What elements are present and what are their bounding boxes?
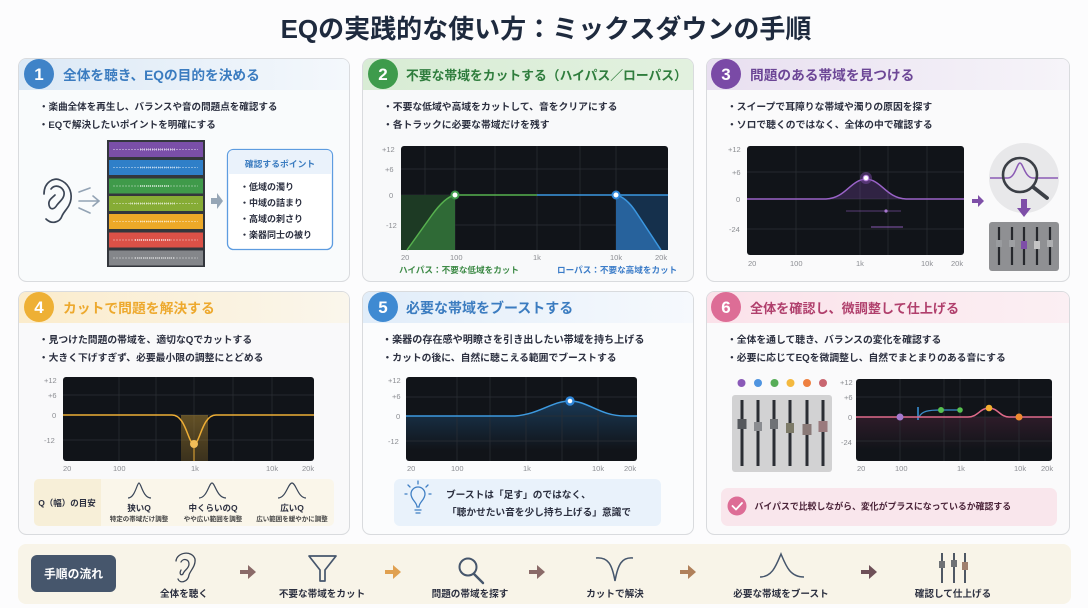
- step 2 bullets: [383, 100, 617, 131]
- step 1 bullets: [39, 101, 277, 131]
- chart: sweep peak: [747, 146, 964, 255]
- Q wide: 広いQ: [280, 503, 304, 513]
- step 3 bullets: [727, 100, 933, 131]
- axis labels: 20: [63, 464, 71, 473]
- callout: check points: [228, 150, 332, 250]
- step 5 header: [363, 292, 693, 323]
- chart: narrow cut: [63, 377, 314, 461]
- step 1 header: [19, 59, 349, 90]
- Q medium: 中くらいのQ: [188, 503, 238, 513]
- axis labels: [382, 145, 667, 262]
- step 2 number badge: [368, 59, 398, 89]
- axis labels: +12: [840, 378, 853, 387]
- flow step: cut: [586, 558, 644, 600]
- axis labels: 20: [401, 253, 409, 262]
- filter captions: ローパス：不要な高域をカット: [557, 264, 677, 275]
- step 1 number badge: 1: [34, 65, 44, 84]
- tip box: 「聴かせたい音を少し持ち上げる」意識で: [447, 506, 631, 518]
- icon: mixer faders: [732, 395, 832, 472]
- panel: step 1: [18, 58, 350, 282]
- step 3 number badge: [711, 59, 741, 89]
- tip box: [394, 479, 661, 526]
- icon: sound arrow: [79, 188, 99, 213]
- step 3 bullets: ・ソロで聴くのではなく、全体の中で確認する: [727, 118, 933, 131]
- axis labels: 1k: [957, 464, 965, 473]
- step 6 bullets: ・全体を通して聴き、バランスの変化を確認する: [727, 333, 941, 346]
- panel: step 5: [362, 292, 694, 534]
- axis labels: 0: [389, 191, 393, 200]
- filter captions: ハイパス：不要な低域をカット: [399, 264, 519, 275]
- step 1 number badge: [24, 59, 54, 89]
- step 2 number badge: 2: [378, 65, 388, 84]
- callout: check points: ・低域の濁り: [240, 181, 294, 192]
- axis labels: -12: [388, 437, 399, 446]
- track stack: [107, 140, 205, 267]
- step 2 bullets: ・各トラックに必要な帯域だけを残す: [383, 118, 550, 131]
- step 4 header: [19, 292, 349, 323]
- axis labels: [388, 376, 636, 473]
- axis labels: 100: [790, 259, 803, 268]
- Q medium: やや広い範囲を調整: [184, 514, 243, 523]
- axis labels: [728, 145, 963, 268]
- icon: ear: [44, 179, 71, 222]
- axis labels: 10k: [1014, 464, 1026, 473]
- step 5 number badge: [368, 292, 398, 322]
- filter captions: [399, 264, 677, 275]
- flow step: search: [432, 558, 508, 600]
- step 5 number badge: 5: [378, 298, 388, 317]
- tip box: ブーストは「足す」のではなく、: [446, 488, 591, 501]
- axis labels: 10k: [610, 253, 622, 262]
- step 6 number badge: 6: [721, 298, 731, 317]
- axis labels: 10k: [921, 259, 933, 268]
- axis labels: +12: [388, 376, 401, 385]
- track colour dots: [738, 379, 827, 387]
- axis labels: -24: [729, 225, 740, 234]
- flow step: listen: [160, 553, 208, 600]
- step 4 heading: カットで問題を解決する: [63, 301, 215, 316]
- axis labels: -12: [386, 221, 397, 230]
- callout: check points: ・高域の刺さり: [240, 213, 303, 224]
- axis labels: 100: [450, 253, 463, 262]
- flow step: boost: 必要な帯域をブースト: [733, 588, 829, 600]
- Q guide box: Q（幅）の目安: [38, 498, 96, 508]
- axis labels: 20: [407, 464, 415, 473]
- icon: faders: [989, 222, 1059, 271]
- icon: check mark: [728, 496, 746, 516]
- axis labels: +12: [44, 376, 57, 385]
- arrow: [240, 565, 256, 579]
- axis labels: 20: [857, 464, 865, 473]
- step 1 heading: 全体を聴き、EQの目的を決める: [63, 67, 260, 83]
- axis labels: +6: [732, 168, 741, 177]
- callout: bypass check: [721, 488, 1057, 526]
- axis labels: 0: [848, 413, 852, 422]
- axis labels: 0: [736, 195, 740, 204]
- axis labels: +12: [382, 145, 395, 154]
- axis labels: 1k: [523, 464, 531, 473]
- flow step: finish: [915, 553, 991, 600]
- flow step: cut: カットで解決: [586, 588, 644, 600]
- axis labels: -24: [841, 438, 852, 447]
- step 3 number badge: 3: [721, 65, 731, 84]
- step 3 heading: 問題のある帯域を見つける: [750, 67, 914, 83]
- axis labels: -12: [44, 436, 55, 445]
- step 2 bullets: ・不要な低域や高域をカットして、音をクリアにする: [383, 100, 617, 113]
- callout: check points: ・中域の詰まり: [240, 197, 303, 208]
- axis labels: 0: [52, 411, 56, 420]
- step 1 bullets: ・EQで解決したいポイントを明確にする: [39, 119, 216, 131]
- panel: procedure flow: [18, 544, 1071, 604]
- step 4 bullets: ・大きく下げすぎず、必要最小限の調整にとどめる: [39, 351, 263, 364]
- axis labels: 20k: [302, 464, 314, 473]
- Q narrow: 狭いQ: [127, 503, 151, 513]
- axis labels: 20k: [1041, 464, 1053, 473]
- arrow: [972, 195, 984, 207]
- Q narrow: [110, 483, 169, 523]
- arrow: [211, 193, 223, 209]
- axis labels: 20k: [624, 464, 636, 473]
- step 4 number badge: 4: [34, 298, 44, 317]
- step 6 number badge: [711, 292, 741, 322]
- step 4 number badge: [24, 292, 54, 322]
- step 6 bullets: ・必要に応じてEQを微調整し、自然でまとまりのある音にする: [727, 351, 1006, 364]
- axis labels: 10k: [592, 464, 604, 473]
- chart: final EQ curve: [856, 379, 1052, 461]
- step 2 header: [363, 59, 693, 90]
- axis labels: 20k: [951, 259, 963, 268]
- step 6 header: [707, 292, 1069, 323]
- step 3 header: [707, 59, 1069, 90]
- step 6 bullets: [727, 333, 1006, 364]
- step 2 heading: 不要な帯域をカットする（ハイパス／ローパス）: [406, 68, 687, 83]
- callout: check points: ・楽器同士の被り: [240, 229, 312, 240]
- axis labels: +6: [844, 393, 853, 402]
- step 5 bullets: ・カットの後に、自然に聴こえる範囲でブーストする: [382, 351, 617, 364]
- axis labels: +12: [728, 145, 741, 154]
- flow step: search: 問題の帯域を探す: [432, 588, 508, 600]
- step 4 bullets: ・見つけた問題の帯域を、適切なQでカットする: [39, 333, 252, 346]
- icon: light bulb: [405, 481, 431, 513]
- step 5 bullets: [382, 333, 644, 364]
- Q guide box: [34, 479, 334, 526]
- Q medium: [184, 483, 243, 523]
- axis labels: 0: [396, 412, 400, 421]
- arrow: [861, 565, 877, 579]
- axis labels: 100: [895, 464, 908, 473]
- flow label: 手順の流れ: [44, 567, 103, 581]
- axis labels: 20k: [655, 253, 667, 262]
- flow step: cut filter: 不要な帯域をカット: [279, 588, 365, 600]
- flow step: finish: 確認して仕上げる: [915, 588, 991, 600]
- flow step: boost: [733, 554, 829, 600]
- axis labels: 1k: [191, 464, 199, 473]
- chart: gentle boost: [406, 377, 637, 461]
- axis labels: 20: [748, 259, 756, 268]
- panel: step 6: [706, 292, 1070, 534]
- axis labels: 1k: [533, 253, 541, 262]
- callout: check points: 確認するポイント: [245, 158, 315, 169]
- Q wide: 広い範囲を緩やかに調整: [256, 514, 328, 523]
- axis labels: 100: [113, 464, 126, 473]
- arrow: [529, 565, 545, 579]
- step 6 heading: 全体を確認し、微調整して仕上げる: [750, 300, 959, 316]
- axis labels: 100: [451, 464, 464, 473]
- callout: bypass check: バイパスで比較しながら、変化がプラスになっているか確認する: [754, 500, 1011, 512]
- axis labels: +6: [48, 391, 57, 400]
- flow step: cut filter: [279, 556, 365, 600]
- axis labels: 1k: [856, 259, 864, 268]
- axis labels: +6: [392, 392, 401, 401]
- panel: step 2: [362, 58, 694, 282]
- chart: high-pass and low-pass EQ: [401, 146, 668, 250]
- arrow: [680, 565, 696, 579]
- panel: step 4: [18, 292, 350, 534]
- step 4 bullets: [39, 333, 263, 364]
- icon: magnifier on peak: [989, 143, 1059, 213]
- axis labels: [840, 378, 1053, 473]
- arrow: [1017, 199, 1031, 217]
- Q narrow: 特定の帯域だけ調整: [110, 514, 169, 523]
- flow step: listen: 全体を聴く: [160, 588, 208, 600]
- arrow: [385, 565, 401, 579]
- axis labels: [44, 376, 314, 473]
- Q wide: [256, 483, 328, 523]
- flow label: [31, 555, 116, 592]
- title: EQの実践的な使い方：ミックスダウンの手順: [281, 14, 811, 44]
- panel: step 3: [706, 58, 1070, 282]
- step 5 heading: 必要な帯域をブーストする: [406, 300, 573, 316]
- step 5 bullets: ・楽器の存在感や明瞭さを引き出したい帯域を持ち上げる: [382, 333, 644, 346]
- axis labels: 10k: [266, 464, 278, 473]
- step 1 bullets: ・楽曲全体を再生し、バランスや音の問題点を確認する: [39, 101, 277, 113]
- axis labels: +6: [385, 165, 394, 174]
- step 3 bullets: ・スイープで耳障りな帯域や濁りの原因を探す: [727, 100, 932, 113]
